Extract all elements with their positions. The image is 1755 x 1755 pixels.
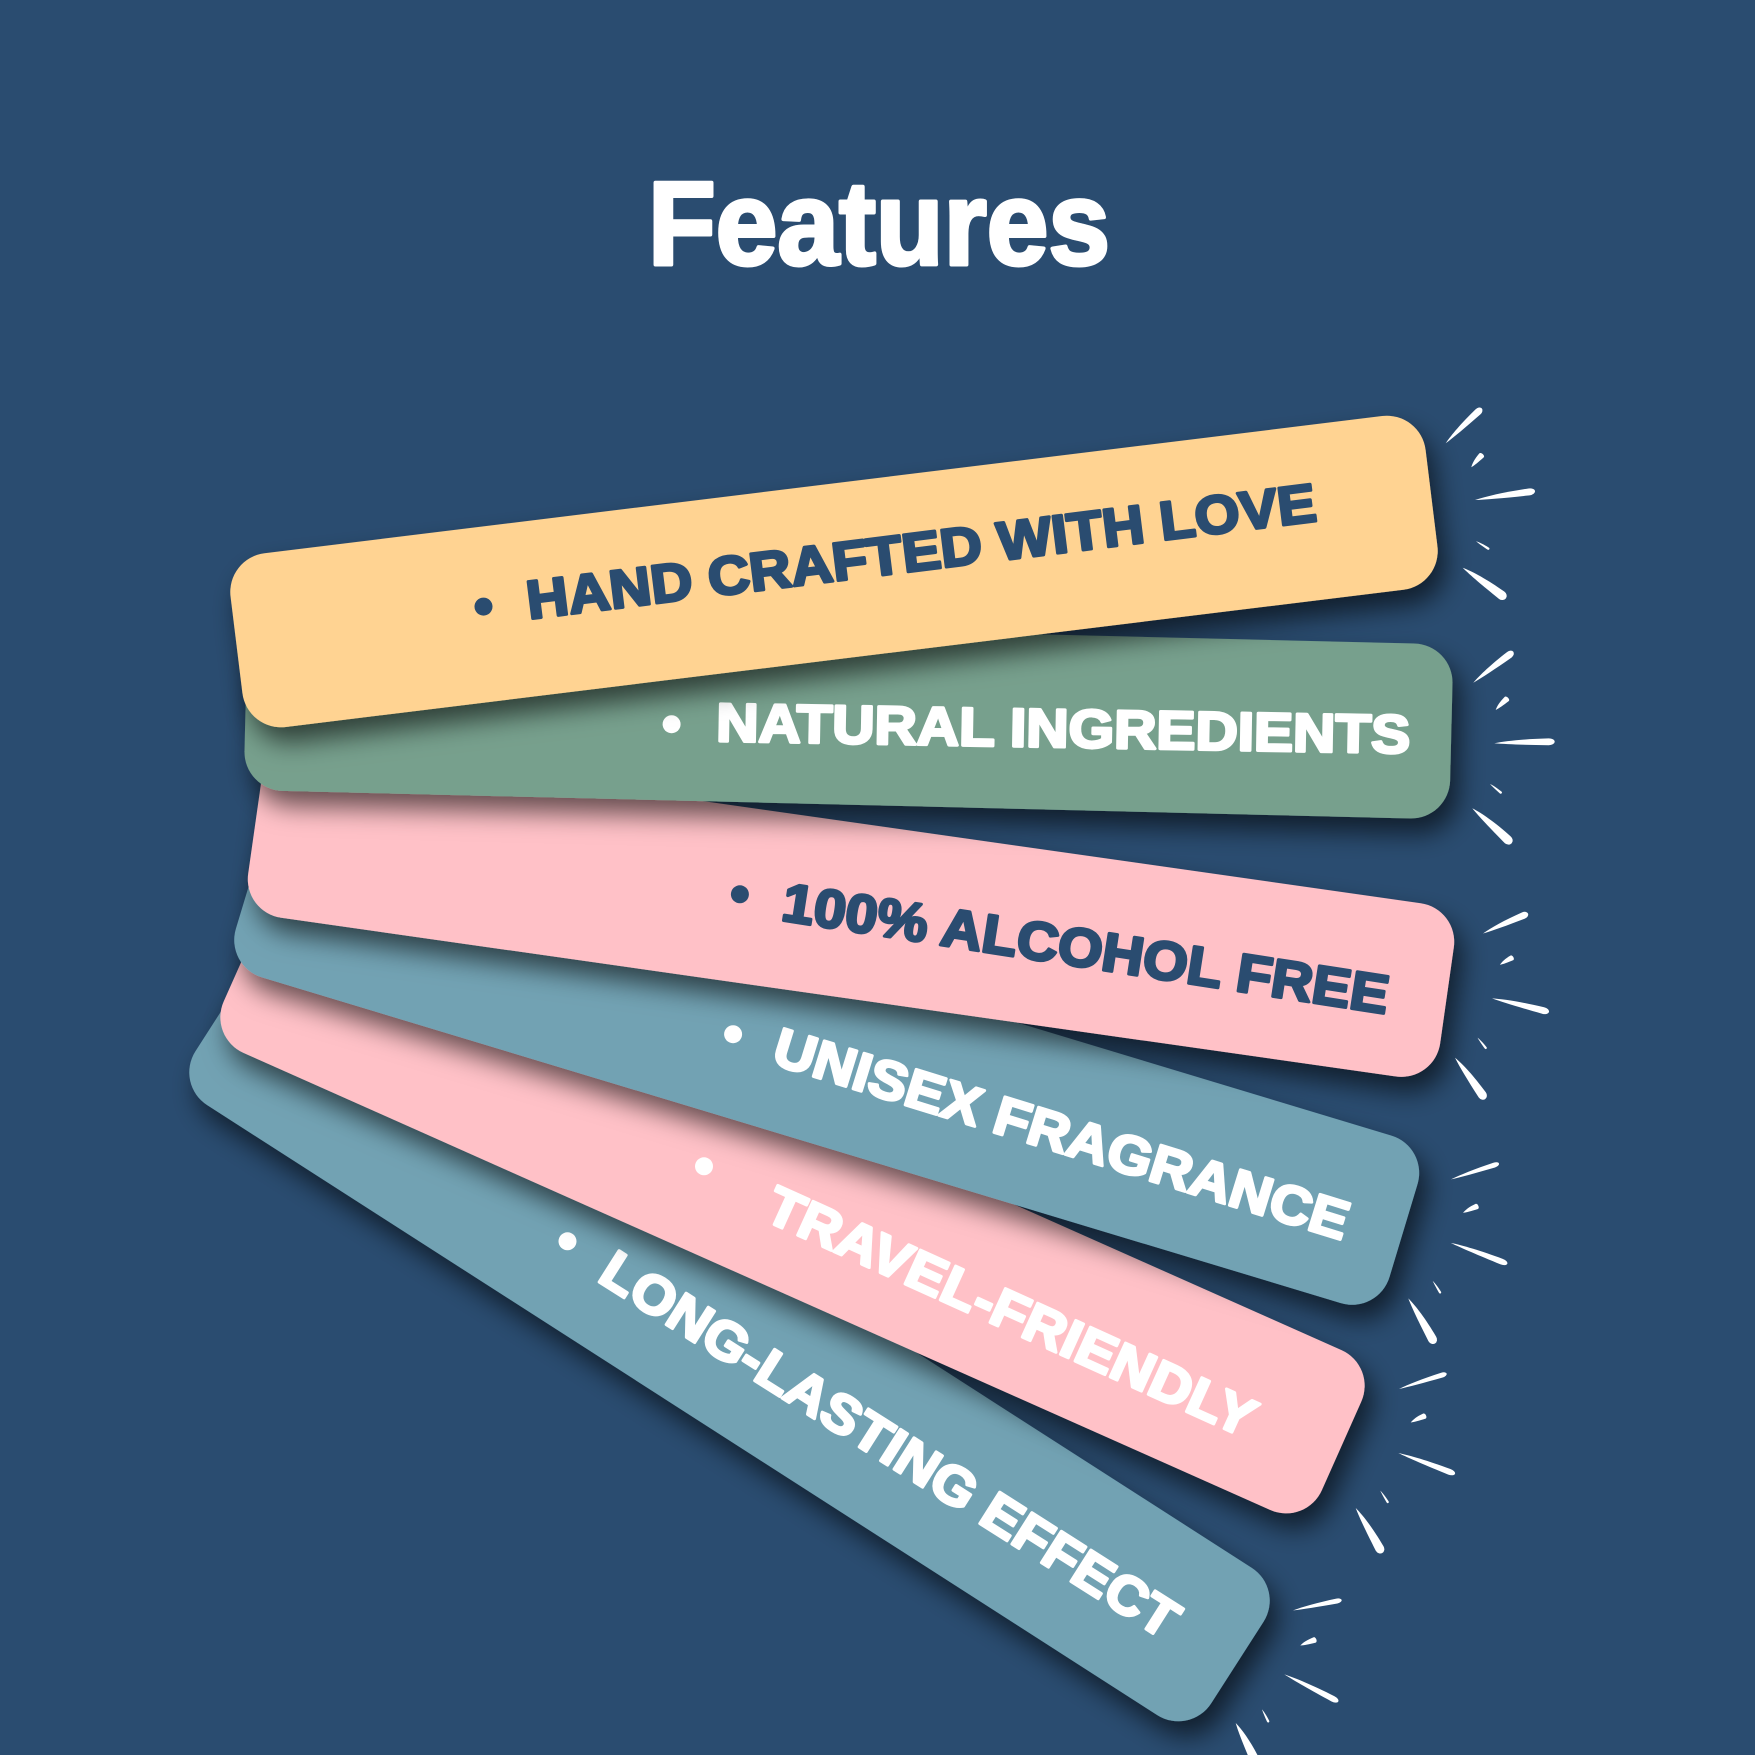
icon: sparks beside natural ingredients bar bbox=[1469, 649, 1555, 847]
bullet bbox=[731, 885, 749, 903]
bullet bbox=[558, 1232, 576, 1250]
label: LONG-LASTING EFFECT bbox=[590, 1239, 1190, 1651]
panel: long-lasting effect bbox=[174, 937, 1285, 1736]
icon: sparks beside long-lasting bar bbox=[1232, 1598, 1342, 1755]
label: UNISEX FRAGRANCE bbox=[766, 1017, 1356, 1252]
label: NATURAL INGREDIENTS bbox=[716, 693, 1411, 765]
icon: sparks beside travel-friendly bar bbox=[1352, 1371, 1456, 1555]
panel: travel-friendly bbox=[208, 877, 1377, 1526]
title: Features bbox=[648, 158, 1110, 290]
label: TRAVEL-FRIENDLY bbox=[757, 1175, 1265, 1449]
label: HAND CRAFTED WITH LOVE bbox=[523, 473, 1319, 631]
icon: sparks beside hand crafted bar bbox=[1443, 406, 1536, 602]
bullet bbox=[695, 1157, 713, 1175]
bullet bbox=[724, 1025, 742, 1043]
bullet bbox=[663, 715, 681, 733]
icon: sparks beside alcohol free bar bbox=[1452, 910, 1550, 1102]
bullet bbox=[474, 598, 492, 616]
label: 100% ALCOHOL FREE bbox=[778, 873, 1393, 1026]
panel: hand crafted with love bbox=[226, 411, 1442, 732]
panel: unisex fragrance bbox=[225, 799, 1429, 1314]
panel: 100% alcohol free bbox=[243, 739, 1459, 1082]
panel: natural ingredients bbox=[244, 615, 1453, 819]
icon: sparks beside unisex fragrance bar bbox=[1404, 1161, 1508, 1346]
